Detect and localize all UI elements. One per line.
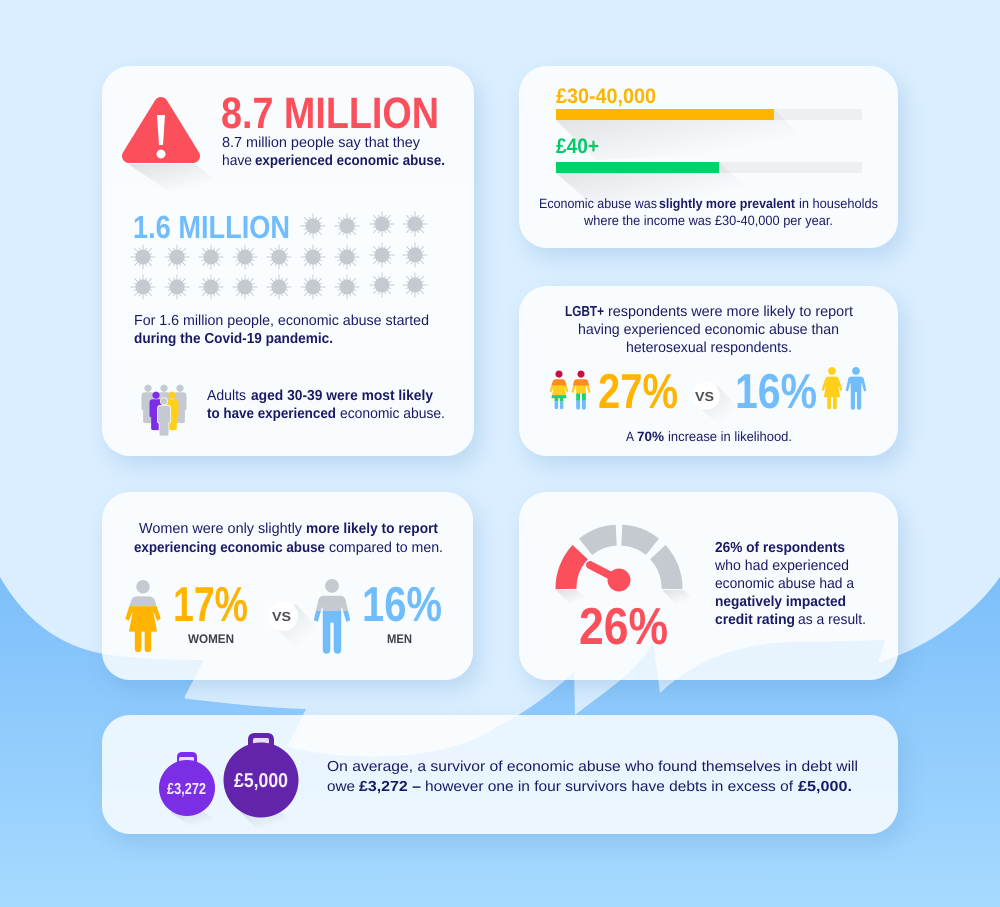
text: 70% increase: 70% (637, 429, 664, 444)
text: debt: £5,000. (798, 779, 852, 795)
text: debt: On average, a survivor of economic abuse who found themselves in debt will (327, 759, 858, 775)
text: LGBT+: respondents were more likely to report (608, 304, 853, 320)
label: men: MEN (387, 632, 412, 646)
text: Covid-19 pandemic (134, 313, 429, 347)
bar: £30-40,000 (556, 109, 862, 160)
text: 70% increase: A (626, 429, 634, 444)
text: Covid-19 pandemic: during the Covid-19 pandemic. (134, 331, 333, 347)
text: income (539, 196, 878, 228)
text: 8.7 million people: experienced economic abuse. (255, 153, 445, 169)
stat: 17%: 17% (173, 578, 248, 632)
stat: 16%: 16% (735, 365, 817, 419)
panel: income (519, 66, 898, 248)
text: income: Economic abuse was (539, 196, 657, 211)
stat: 26%: 26% (579, 598, 668, 656)
text: credit rating: 26% of respondents (715, 540, 845, 556)
icon: man (314, 579, 350, 654)
text: debt: however one in four survivors have debts in excess of (425, 779, 794, 795)
icon: yellow woman (822, 367, 842, 409)
text: income: in households (799, 196, 878, 211)
text: 70% increase: increase in likelihood. (668, 429, 792, 444)
icons: virus grid (130, 212, 428, 300)
icon: small weight £3,272 (159, 752, 225, 826)
label: £40+: £40+ (556, 135, 599, 158)
text: debt: £3,272 – (359, 779, 421, 795)
text: credit rating: who had experienced (714, 558, 849, 574)
badge: vs: VS (695, 389, 714, 404)
badge: vs (268, 601, 322, 648)
panel: 8.7 million, 1.6 million and ages (102, 66, 474, 456)
label: £30-40,000: £30-40,000 (556, 85, 656, 108)
badge: vs (692, 382, 742, 425)
text: women vs men (134, 521, 443, 556)
text: aged 30-39: Adults (207, 388, 246, 404)
text: LGBT+: LGBT+ (565, 304, 604, 320)
text: income: slightly more prevalent (659, 196, 795, 211)
chart: gauge (556, 535, 698, 604)
icon: blue man (846, 367, 866, 410)
text: credit rating: economic abuse had a (715, 576, 855, 592)
icon: large weight £5,000 (224, 733, 298, 828)
text: LGBT+ (565, 304, 853, 356)
stat: 16%: 16% (362, 578, 442, 632)
text: women vs men: compared to men. (329, 540, 443, 556)
text: debt (327, 759, 858, 795)
text: credit rating (714, 540, 866, 628)
bar: £40+ (556, 162, 862, 208)
icon: small weight £3,272: £3,272 (167, 781, 206, 798)
text: women vs men: Women were only slightly (139, 521, 303, 537)
text: income: where the income was £30-40,000 per year. (583, 213, 833, 228)
text: Covid-19 pandemic: For 1.6 million people, economic abuse started (134, 313, 429, 329)
panel: debt (102, 715, 898, 834)
panel: credit rating (519, 492, 898, 680)
panel: LGBT+ (519, 286, 898, 456)
text: 8.7 million people: have (222, 153, 252, 169)
text: credit rating: negatively impacted (715, 594, 846, 610)
text: 8.7 million people: 8.7 million people say that they (222, 135, 421, 151)
panel: women vs men (102, 492, 473, 680)
text: credit rating: as a result. (798, 612, 866, 628)
icon: group of people (142, 385, 186, 436)
label: women: WOMEN (188, 632, 234, 646)
text: women vs men: more likely to report (306, 521, 438, 537)
text: aged 30-39: to have experienced (207, 406, 336, 422)
text: LGBT+: heterosexual respondents. (626, 340, 792, 356)
icon: rainbow woman (550, 370, 568, 410)
icon: warning triangle (128, 104, 230, 192)
text: aged 30-39 (207, 388, 445, 422)
text: 8.7 million people (222, 135, 445, 169)
icon: rainbow man (572, 370, 590, 410)
text: debt: owe (327, 779, 355, 795)
heading: 1.6 million: 1.6 MILLION (133, 209, 290, 245)
text: aged 30-39: aged 30-39 were most likely (251, 388, 433, 404)
badge: vs: VS (272, 609, 291, 624)
panel shadows (108, 76, 904, 844)
heading: 8.7 million: 8.7 MILLION (221, 89, 439, 138)
icon: large weight £5,000: £5,000 (234, 770, 288, 792)
icon: woman (125, 580, 161, 652)
stat: 27%: 27% (598, 365, 678, 419)
text: credit rating: credit rating (715, 612, 795, 628)
text: aged 30-39: economic abuse. (340, 406, 445, 422)
text: LGBT+: having experienced economic abuse than (578, 322, 839, 338)
text: women vs men: experiencing economic abuse (134, 540, 325, 556)
